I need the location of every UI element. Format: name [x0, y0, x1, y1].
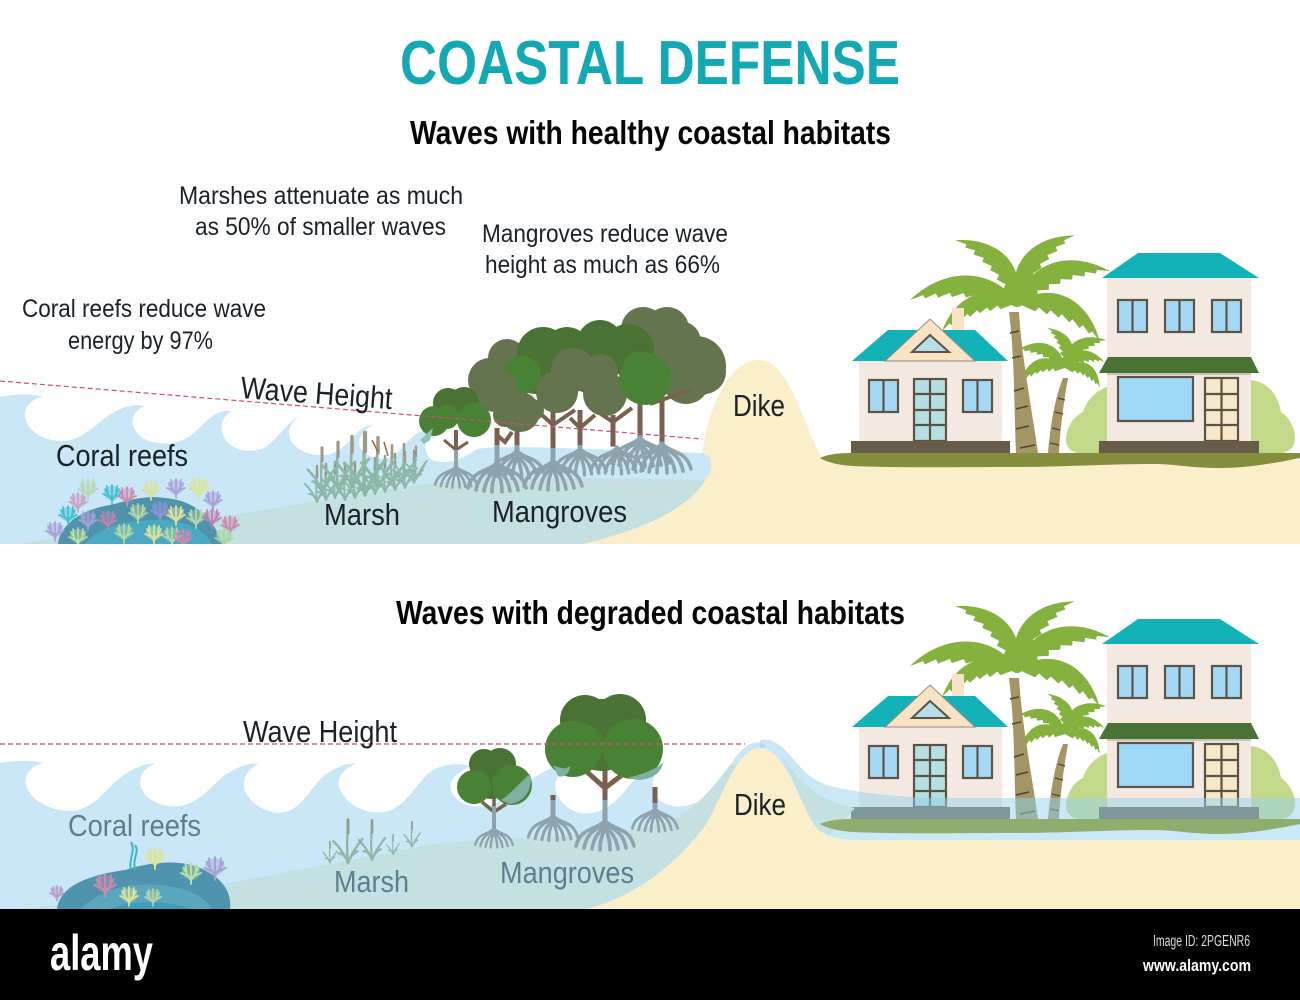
flooded ground strip	[820, 819, 1300, 834]
callout: coral reefs: Coral reefs reduce wave	[22, 295, 266, 323]
callout: marshes: Marshes attenuate as much	[179, 182, 463, 210]
coral reef	[50, 842, 230, 909]
label: marsh: Marsh	[324, 497, 400, 532]
wave height line	[0, 743, 745, 745]
coral reef	[46, 478, 239, 548]
small palm	[1015, 687, 1107, 819]
sand and dike	[587, 748, 1300, 909]
house: small	[851, 308, 1010, 453]
wave height line	[0, 381, 702, 439]
sea floor band behind dike	[780, 752, 855, 834]
mangrove forest	[419, 307, 726, 492]
house: two-storey	[1099, 253, 1259, 453]
callout: mangroves: Mangroves reduce wave	[482, 220, 728, 248]
sea floor	[20, 760, 760, 909]
title: COASTAL DEFENSE	[400, 29, 900, 98]
label: wave height: Wave Height	[243, 714, 397, 749]
label: wave height: Wave Height	[239, 370, 394, 416]
label: marsh: Marsh	[334, 864, 409, 899]
water with waves	[0, 394, 711, 544]
marsh grass	[323, 820, 420, 863]
big palm	[910, 219, 1111, 453]
panel: degraded coastal habitats	[0, 585, 1300, 909]
sand and dike	[560, 360, 1300, 544]
house: two-storey	[1099, 619, 1259, 819]
sea floor	[20, 476, 708, 544]
label: coral reefs: Coral reefs	[68, 808, 201, 843]
footer logo: alamy	[50, 925, 153, 981]
callout: marshes: as 50% of smaller waves	[195, 213, 446, 241]
bushes	[1066, 746, 1295, 819]
mangrove: small tree	[457, 748, 532, 848]
mangrove: large tree	[545, 694, 663, 850]
bushes	[1066, 380, 1295, 453]
panel: healthy coastal habitats	[0, 114, 1300, 548]
water with waves	[0, 742, 765, 909]
house: small	[851, 674, 1010, 819]
ground strip	[820, 453, 1300, 468]
label: dike: Dike	[734, 787, 786, 822]
label: mangroves: Mangroves	[500, 855, 634, 890]
heading: healthy habitats: Waves with healthy coastal habitats	[410, 114, 891, 151]
callout: mangroves: height as much as 66%	[485, 251, 720, 279]
marsh grass	[305, 433, 427, 502]
heading: degraded habitats: Waves with degraded coastal habitats	[396, 594, 905, 631]
mangrove: stump left	[528, 795, 578, 840]
footer image id: Image ID: 2PGENR6	[1153, 933, 1250, 950]
callout: coral reefs: energy by 97%	[68, 327, 213, 355]
flood water over houses	[760, 740, 1300, 840]
footer website: www.alamy.com	[1142, 956, 1251, 975]
big palm	[910, 585, 1111, 819]
mangrove: stump right	[632, 787, 678, 831]
small palm	[1015, 321, 1107, 453]
label: dike: Dike	[733, 388, 785, 423]
label: coral reefs: Coral reefs	[56, 438, 188, 473]
label: mangroves: Mangroves	[492, 494, 627, 529]
footer bar	[0, 909, 1300, 1000]
